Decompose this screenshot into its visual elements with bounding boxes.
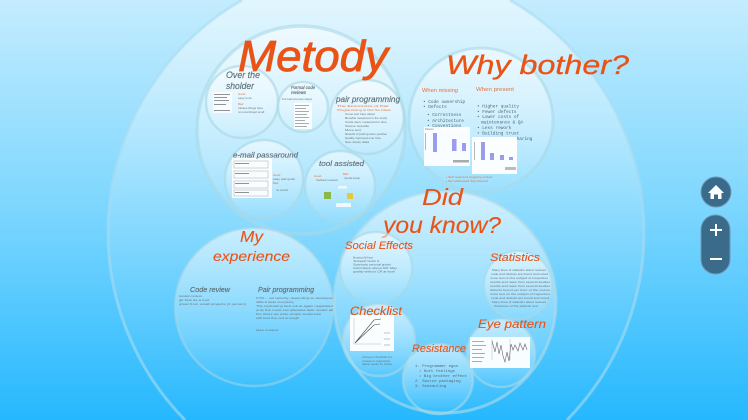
panel: formal code review: Formal process steps [282, 97, 313, 101]
text: code review: Hardens reviews [179, 294, 203, 298]
panel: resistance [403, 343, 473, 414]
panel: tool assisted: needs setup [344, 176, 360, 180]
text: when present: • Higher quality [477, 104, 520, 110]
icon: house [708, 185, 724, 199]
panel: formal code review: reviews [291, 90, 307, 95]
text: when missing: • Conventions [427, 124, 462, 129]
panel: statistics: Many lines of statistics about reviews [492, 300, 547, 304]
text: when present: When present [476, 87, 515, 93]
panel: pair programming: Costs were measured in time [345, 120, 387, 124]
text: code review [179, 287, 246, 306]
text: when present: • Lower costs of [477, 115, 520, 120]
panel: over the shoulder: Over the [226, 70, 260, 80]
panel: e-mail pass-around: easy and quick [273, 177, 296, 181]
panel: social effects [340, 232, 414, 304]
text: when present: • Building trust [477, 132, 520, 136]
text: pair programming: the times we write simple sentences [256, 312, 322, 316]
text: code review: git lists as a tool [179, 298, 209, 302]
panel: over the shoulder: misses things here [238, 106, 263, 110]
panel: social effects: Systematic personal growth [353, 262, 391, 266]
panel: over the shoulder [206, 66, 278, 138]
text: pair programming: still feel the not enough [256, 316, 299, 320]
chart: bars missing [424, 127, 470, 166]
text: code review: Code review [190, 287, 231, 294]
chart: bars present [472, 137, 517, 174]
text: pair programming: only the most complicated task meant all [256, 308, 333, 312]
panel: over the shoulder: Bad [238, 102, 244, 106]
panel: formal code review [278, 82, 328, 132]
note [446, 175, 492, 183]
text: pair programming: Has cooled [256, 328, 278, 332]
panel: e-mail pass-around: no record [276, 188, 288, 192]
text: when missing: • Correctness [427, 113, 462, 118]
panel: social effects: Information about CR: May [353, 266, 398, 270]
text: when missing [422, 88, 466, 129]
panel: statistics: results and rates from several studies [490, 280, 551, 284]
text: when present: • Fewer defects [477, 110, 517, 115]
panel: statistics: Statistics [490, 252, 541, 264]
title: Did you know? [381, 184, 501, 238]
icon: minus [710, 258, 722, 260]
panel: My experience [175, 228, 333, 386]
text: when missing: • Code ownership [423, 100, 466, 105]
title: Metody: Metody [238, 32, 391, 81]
panel: e-mail pass-around: Good [273, 173, 281, 177]
panel: formal code review: Formal code [291, 85, 315, 90]
text: pair programming: CTO – not velocity, depending on developer [256, 296, 333, 300]
panel: e-mail pass-around [225, 140, 303, 218]
panel: pair programming: Results of pairing were positive [345, 132, 387, 136]
panel: pair programming: Benefits measured in the study [345, 116, 387, 120]
text: when present: sharing [514, 137, 533, 142]
panel: social effects: Boosting Self-trust [353, 256, 373, 260]
title: Why bother?: Why bother? [446, 50, 629, 80]
panel: pair programming: See study data [345, 140, 369, 144]
panel: e-mail pass-around: Bad [273, 181, 279, 185]
text: pair programming: Pair programming [258, 287, 314, 294]
icon: plus [710, 224, 722, 236]
panel: social effects: Social Effects [345, 240, 414, 252]
panel: pair programming: Quality improved over time [345, 136, 381, 140]
panel: social effects: quality without CR at work [353, 270, 396, 274]
chart: eye pattern [470, 337, 530, 368]
panel: pair programming: The Economics of Pair [337, 104, 389, 108]
text: when present [476, 87, 533, 142]
panel: over the shoulder: Good [238, 92, 246, 96]
panel: tool assisted: tool assisted [319, 159, 365, 168]
panel: Why bother [409, 48, 629, 192]
panel: statistics: code and defects are found and noted [491, 296, 550, 300]
panel: eye pattern [467, 319, 546, 387]
panel: checklist: Checklist [350, 306, 403, 318]
text: pair programming: skills & tasks complexity [256, 300, 295, 304]
chart: bars missing: Defects [425, 128, 434, 131]
panel: pair programming: pair programming [335, 95, 401, 104]
text: when missing: When missing [422, 88, 458, 94]
panel: resistance: Resistance [412, 343, 466, 355]
panel: pair programming [330, 80, 404, 154]
panel: Did you know [334, 184, 556, 414]
panel: resistance: 1. Programmer egos [415, 364, 459, 369]
panel: checklist: Using a checklist for [362, 355, 392, 359]
title: Did you know?: Did [422, 184, 464, 210]
panel: statistics: final lines of the statistic text [494, 304, 538, 308]
panel: tool assisted [305, 151, 375, 221]
button: home [701, 177, 731, 207]
panel: checklist: Higher quality by review [362, 362, 393, 366]
text: pair programming [256, 287, 333, 332]
panel: pair programming: Programming is Not So Clear [337, 108, 391, 112]
outer circle [108, 0, 644, 420]
panel: over the shoulder: easy to do [238, 96, 252, 100]
panel: resistance: • Hurt feelings [419, 369, 456, 374]
panel: resistance: 3. Scheduling [415, 384, 447, 389]
panel: statistics: more text on the subject of inspection [490, 276, 549, 280]
panel: tool assisted: Good [314, 174, 322, 178]
panel: pair programming: Some results [345, 124, 370, 128]
panel: social effects: "Ecological" transfer of [353, 259, 379, 263]
title: My experience: My [240, 229, 264, 246]
note: • Self read and targeting coded [446, 175, 492, 179]
panel: eye pattern: Eye pattern [478, 319, 546, 331]
panel: statistics: code and defects are found and noted [491, 272, 549, 276]
panel: statistics: more text on the subject of inspection [490, 292, 551, 296]
text: pair programming: The implicating best job at again negotiated [256, 304, 333, 308]
panel: tool assisted: Bad [343, 172, 349, 176]
panel: resistance: 2. Source packaging [415, 379, 461, 384]
text: code review: great from small projects (1 person) [179, 302, 246, 306]
panel: over the shoulder: no record kept at all [238, 110, 265, 114]
panel: statistics: Many lines of statistics about reviews [492, 268, 547, 272]
button: zoom controls [701, 215, 730, 274]
panel: statistics [484, 251, 552, 319]
panel: checklist [343, 304, 415, 376]
panel: statistics: results and rates from several studies [490, 284, 551, 288]
panel: resistance: • Big brother effect [419, 374, 467, 379]
chart: checklist curves [350, 315, 394, 351]
panel: statistics: defects found per hour of the review [490, 288, 551, 292]
panel: Metody [197, 26, 405, 234]
text: when present: • Less rework [477, 126, 512, 131]
panel: pair programming: More text [345, 128, 361, 132]
panel: e-mail pass-around: e-mail passaround [233, 152, 299, 160]
panel: pair programming: Some text here about [345, 112, 375, 116]
panel: checklist: review is important [362, 359, 390, 363]
title: My experience [213, 229, 290, 264]
panel: over the shoulder: sholder [226, 81, 255, 91]
title: Did you know?: you know? [381, 212, 501, 238]
note: • Not addressed Sign Record [446, 179, 488, 183]
text: when present: maintenance & QA [481, 120, 524, 126]
panel: tool assisted: tracked reviews [316, 178, 339, 182]
text: when missing: • Architecture [427, 119, 464, 124]
title: My experience: experience [213, 248, 290, 264]
text: when missing: • Defects [423, 105, 447, 110]
